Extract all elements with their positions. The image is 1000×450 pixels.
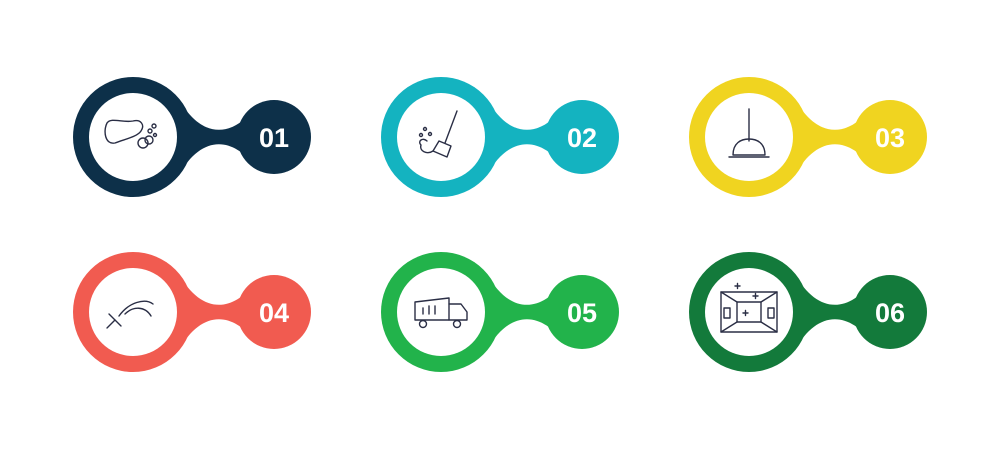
item 01 (73, 77, 311, 197)
icon: garbage truck (415, 298, 467, 328)
number 01: 01 (259, 123, 289, 153)
icon: clean room (721, 284, 777, 332)
icon: soap (105, 120, 156, 148)
number 03: 03 (875, 123, 905, 153)
icon: broom (420, 111, 457, 157)
number 04: 04 (259, 298, 289, 328)
item 02 (381, 77, 619, 197)
item 04 (73, 252, 311, 372)
item 06 (689, 252, 927, 372)
item 05 (381, 252, 619, 372)
icon: plunger (729, 109, 769, 157)
number 06: 06 (875, 298, 905, 328)
number 05: 05 (567, 298, 597, 328)
item 03 (689, 77, 927, 197)
number 02: 02 (567, 123, 597, 153)
icon: squeegee (107, 301, 153, 328)
